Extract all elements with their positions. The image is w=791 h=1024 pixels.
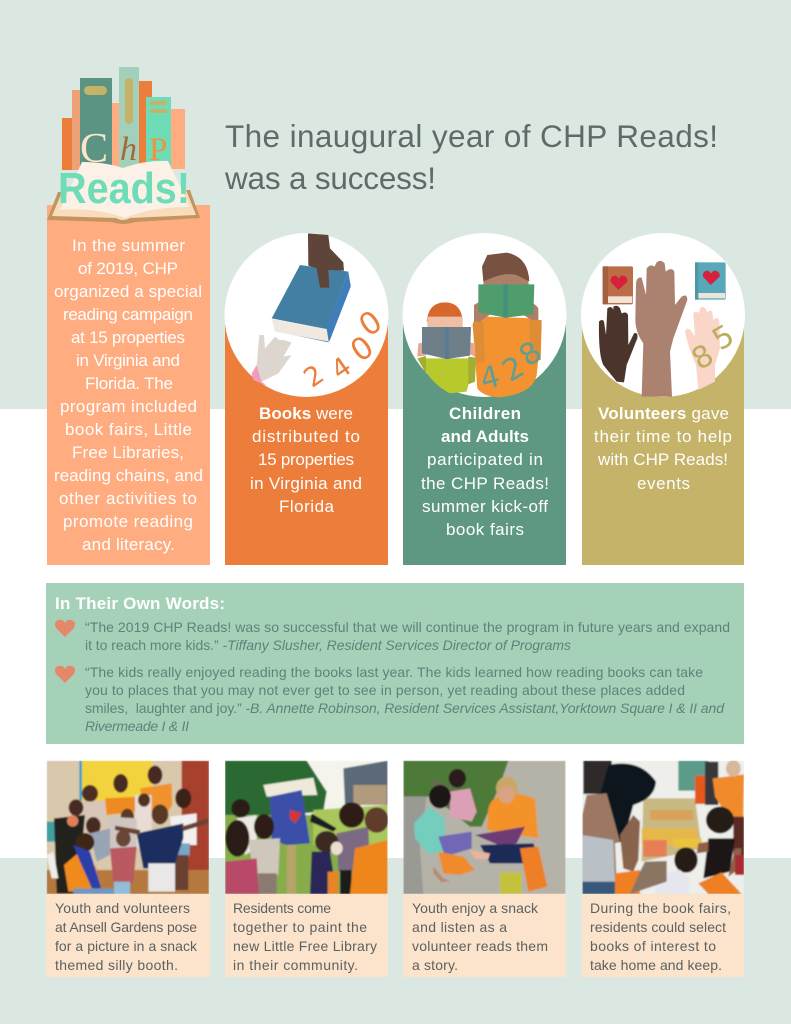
photo: painting the Little Free Library: [225, 761, 389, 894]
caption: Ansell Gardens: for a picture in a snack: [55, 938, 198, 954]
panel: intro: program included: [60, 397, 197, 416]
panel: intro: in Virginia and: [76, 351, 180, 370]
quote 2: you to places that you may not ever get to see in person, yet reading about these places added: [85, 682, 685, 698]
icon: hands passing a book, 2400: 0: [345, 330, 381, 370]
panel: volunteers: with CHP Reads!: [597, 450, 728, 469]
quote 1: [85, 619, 730, 653]
caption: snack and story: a story.: [412, 957, 458, 973]
panel: books: 15 properties: [258, 450, 354, 469]
panel: children and adults: participated in: [427, 450, 543, 469]
quote 2: [85, 664, 725, 734]
quote 2: Rivermeade I & II: [85, 718, 189, 734]
icon: children reading, 428: 428: [476, 335, 549, 398]
icon: hands passing a book, 2400: 4: [326, 351, 357, 386]
quote 1: “The 2019 CHP Reads! was so successful that we will continue the program in future years and expand: [85, 619, 730, 635]
panel: intro: [47, 205, 210, 565]
caption: snack and story: volunteer reads them: [412, 938, 548, 954]
panel: volunteers: events: [637, 474, 690, 493]
caption: Little Free Library: in their community.: [233, 957, 358, 973]
logo: CHP Reads! books: P: [149, 132, 167, 168]
panel: intro: of 2019, CHP: [78, 259, 178, 278]
panel: children and adults: and Adults: [441, 427, 529, 446]
icon: hands passing a book, 2400: 0: [353, 304, 389, 344]
caption: snack and story: Youth enjoy a snack: [412, 900, 539, 916]
panel: intro: organized a special: [54, 282, 202, 301]
icon: hands passing a book, 2400: [252, 233, 389, 394]
icon: heart: [55, 620, 75, 637]
photo: volunteer reading a story: [403, 761, 566, 894]
photo: book fair table: [582, 760, 744, 894]
panel: intro: other activities to: [59, 489, 197, 508]
panel: intro: Free Libraries,: [72, 443, 184, 462]
caption: book fairs: [582, 894, 744, 977]
title: The inaugural year of CHP Reads!: [225, 118, 718, 154]
caption: Ansell Gardens: Youth and volunteers: [55, 900, 190, 916]
panel: children and adults: [402, 233, 566, 565]
panel: intro: Florida. The: [85, 374, 173, 393]
caption: Ansell Gardens: themed silly booth.: [55, 957, 178, 973]
logo: CHP Reads! books: [47, 67, 200, 224]
panel: books: Books were: [259, 404, 353, 423]
logo: CHP Reads! books: C: [80, 126, 108, 172]
panel: children and adults: book fairs: [446, 520, 524, 539]
panel: volunteers: their time to help: [594, 427, 732, 446]
panel: intro: book fairs, Little: [65, 420, 192, 439]
caption: book fairs: residents could select: [590, 919, 726, 935]
title: [224, 118, 718, 196]
logo: CHP Reads! books: h: [120, 131, 137, 168]
panel: volunteers: Volunteers gave: [598, 404, 729, 423]
icon: raised hands and books, 85: 85: [686, 318, 741, 378]
quote 1: it to reach more kids.” -Tiffany Slusher, Resident Services Director of Programs: [85, 637, 571, 653]
icon: raised hands and books, 85: [599, 261, 741, 397]
quote 2: “The kids really enjoyed reading the books last year. The kids learned how reading books can take: [85, 664, 703, 680]
panel: intro: and literacy.: [82, 535, 175, 554]
caption: snack and story: and listen as a: [412, 919, 507, 935]
panel: children and adults: the CHP Reads!: [421, 474, 549, 493]
panel: books: [224, 233, 389, 565]
caption: Little Free Library: [225, 894, 388, 977]
panel: In Their Own Words: [46, 583, 744, 744]
panel: intro: reading campaign: [63, 305, 193, 324]
caption: Ansell Gardens: at Ansell Gardens pose: [55, 919, 197, 935]
caption: book fairs: take home and keep.: [590, 957, 722, 973]
icon: hands passing a book, 2400: 2: [298, 359, 330, 394]
photo: Ansell Gardens snack booth: [47, 761, 209, 894]
quote 2: smiles, laughter and joy.” -B. Annette Robinson, Resident Services Assistant,Yorktown Square I & II and: [85, 700, 725, 716]
panel: children and adults: Children: [449, 404, 521, 423]
panel: books: Florida: [279, 497, 335, 516]
icon: children reading, 428: [417, 253, 549, 398]
title: was a success!: [224, 160, 436, 196]
caption: Little Free Library: Residents come: [233, 900, 331, 916]
panel: children and adults: summer kick-off: [422, 497, 548, 516]
caption: book fairs: During the book fairs,: [590, 900, 731, 916]
panel: books: in Virginia and: [250, 474, 362, 493]
caption: Ansell Gardens: [46, 894, 210, 977]
icon: heart: [55, 666, 75, 683]
panel: intro: In the summer: [72, 236, 185, 255]
heading: In Their Own Words: In Their Own Words:: [55, 594, 225, 613]
panel: intro: promote reading: [63, 512, 193, 531]
logo: CHP Reads! books: Reads!: [58, 164, 190, 213]
caption: Little Free Library: together to paint the: [233, 919, 367, 935]
panel: books: distributed to: [252, 427, 360, 446]
panel: volunteers: [581, 233, 745, 565]
panel: intro: at 15 properties: [71, 328, 185, 347]
caption: book fairs: books of interest to: [590, 938, 716, 954]
caption: Little Free Library: new Little Free Library: [233, 938, 377, 954]
caption: snack and story: [403, 894, 566, 977]
panel: intro: reading chains, and: [54, 466, 203, 485]
